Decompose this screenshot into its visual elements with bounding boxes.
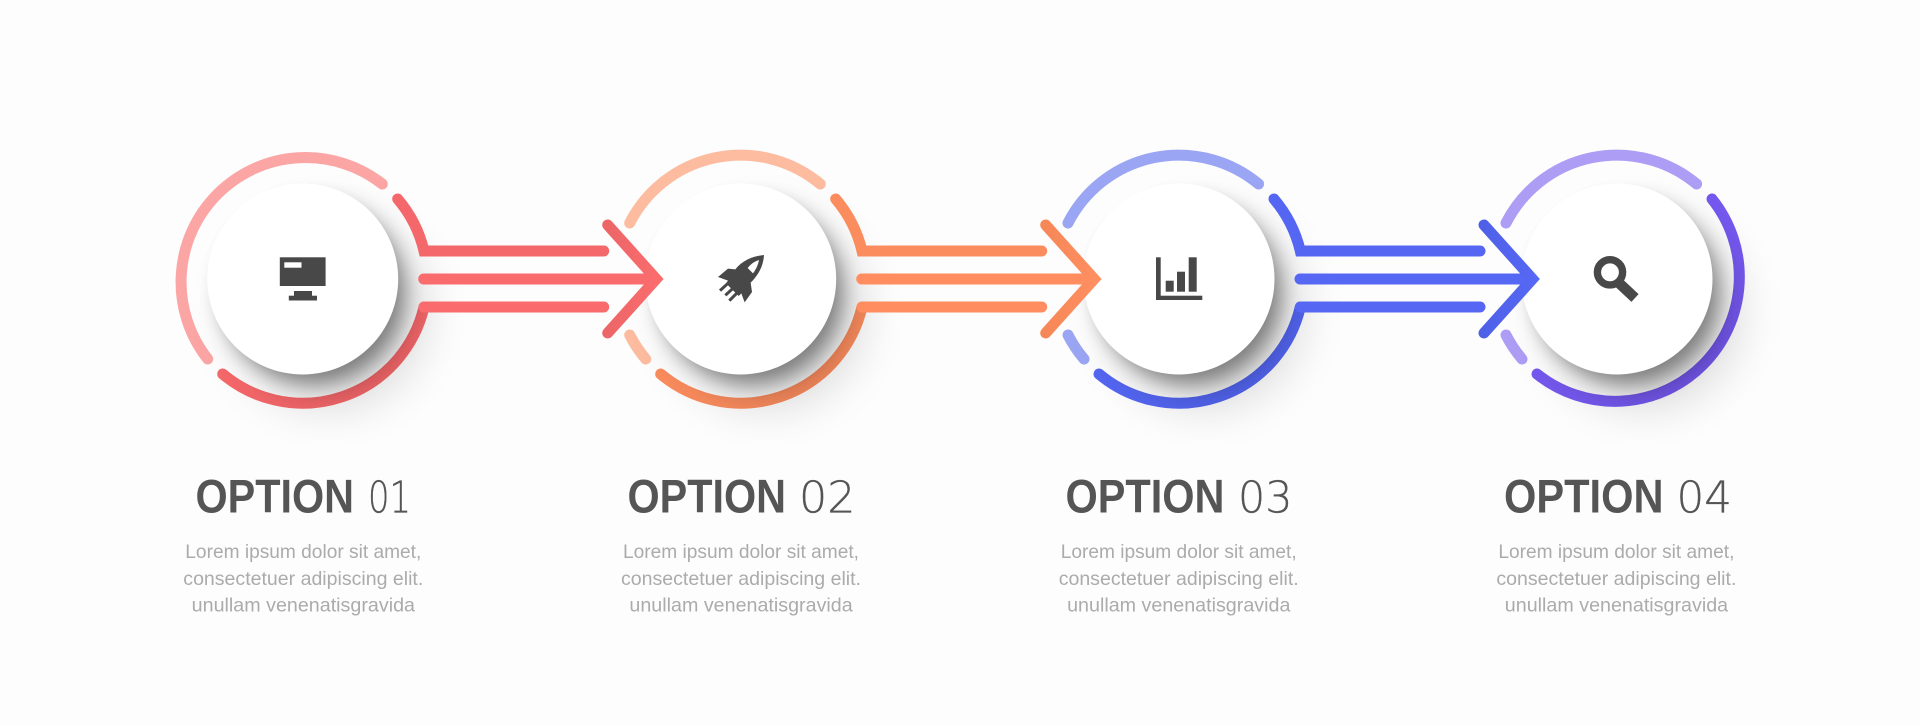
ring 4 white disc xyxy=(1522,184,1712,374)
ring 4 shadow xyxy=(1535,200,1738,406)
heading 01: OPTION xyxy=(196,470,354,522)
body 02: Lorem ipsum dolor sit amet, xyxy=(623,541,859,563)
body 04: consectetuer adipiscing elit. xyxy=(1496,568,1736,590)
number 03: 03 xyxy=(1238,472,1292,524)
body 03: consectetuer adipiscing elit. xyxy=(1059,568,1299,590)
body 02 xyxy=(621,541,861,617)
text block: option 02 xyxy=(621,470,861,617)
body 04: Lorem ipsum dolor sit amet, xyxy=(1498,541,1734,563)
body 03: Lorem ipsum dolor sit amet, xyxy=(1061,541,1297,563)
ring 2 light top arc xyxy=(630,155,820,223)
ring 4 light small arc xyxy=(1506,335,1522,359)
ring 3 light small arc xyxy=(1068,335,1084,359)
step 2 circle xyxy=(630,155,862,406)
icon: bar chart xyxy=(1156,257,1202,300)
ring 4 dark right arc xyxy=(1537,199,1739,401)
step 3 circle xyxy=(1068,155,1300,406)
body 01 xyxy=(183,541,423,617)
body 04: unullam venenatisgravida xyxy=(1505,595,1728,617)
icon: rocket xyxy=(718,255,764,302)
arrow 1 xyxy=(398,199,656,333)
ring 2 light small arc xyxy=(630,335,646,359)
icon: monitor xyxy=(280,257,326,300)
icon: magnifier xyxy=(1597,260,1635,298)
arrow 2 xyxy=(836,199,1094,333)
number 04: 04 xyxy=(1676,472,1732,524)
body 03 xyxy=(1059,541,1299,617)
step 4 circle xyxy=(1506,155,1739,406)
body 02: consectetuer adipiscing elit. xyxy=(621,568,861,590)
ring 1 shadow xyxy=(221,200,424,406)
ring 1 light arc xyxy=(181,158,382,359)
ring 3 white disc xyxy=(1084,184,1274,374)
heading 03: OPTION xyxy=(1066,470,1224,522)
heading 04: OPTION xyxy=(1504,470,1664,522)
ring 2 dark bottom arc xyxy=(661,307,862,403)
body 04 xyxy=(1496,541,1736,617)
ring 2 shadow xyxy=(659,200,862,406)
ring 3 light top arc xyxy=(1068,155,1259,223)
ring 1 dark bottom arc xyxy=(223,307,424,403)
text block: option 01 xyxy=(183,470,423,617)
ring 3 shadow xyxy=(1097,200,1300,406)
ring 2 white disc xyxy=(645,184,836,374)
text block: option 04 xyxy=(1496,470,1736,617)
body 03: unullam venenatisgravida xyxy=(1067,595,1291,617)
body 01: unullam venenatisgravida xyxy=(192,595,415,617)
body 01: Lorem ipsum dolor sit amet, xyxy=(185,541,421,563)
number 01: 01 xyxy=(368,472,411,524)
body 02: unullam venenatisgravida xyxy=(629,595,853,617)
arrow 3 xyxy=(1274,199,1532,333)
body 01: consectetuer adipiscing elit. xyxy=(183,568,423,590)
ring 1 white disc xyxy=(207,184,398,374)
step 1 circle xyxy=(181,158,424,406)
number 02: 02 xyxy=(799,472,856,524)
text block: option 03 xyxy=(1059,470,1299,617)
ring 3 dark bottom arc xyxy=(1099,307,1300,403)
ring 4 light top arc xyxy=(1506,155,1697,223)
heading 02: OPTION xyxy=(628,470,786,522)
